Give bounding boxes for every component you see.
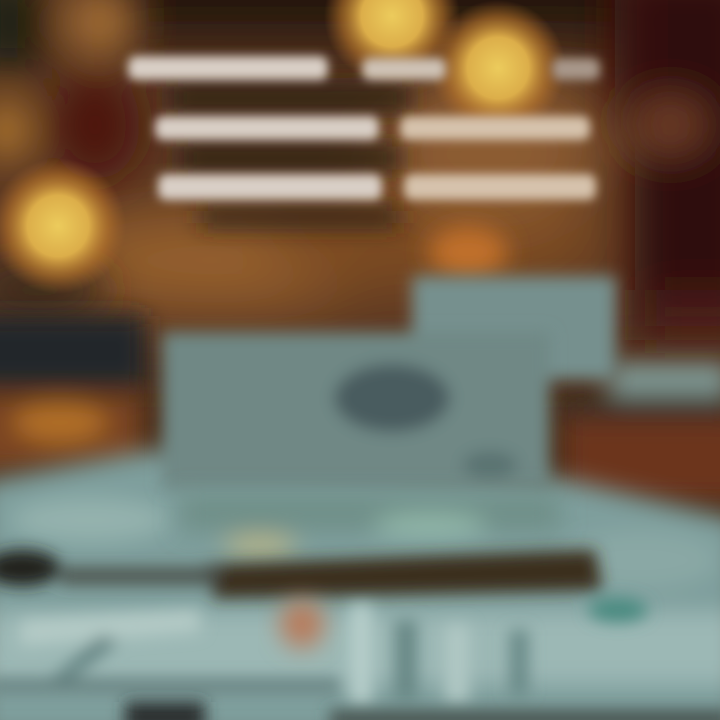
lower edge of stack with highlights [180,495,560,558]
rear banknote [412,276,616,380]
headline line 1 [128,56,600,80]
background: warm upper wall [0,0,720,360]
banknote portrait dark centre [334,364,450,432]
table: reddish brown right [560,362,720,500]
blurred headline lines [128,56,600,200]
headline line 2 [155,116,590,140]
central banknote card [162,332,550,490]
table: dark navy and orange left [0,316,145,468]
background: dark red and green upper left [0,0,140,314]
dark strap across the pile [0,550,648,622]
orange accent below strap [280,600,324,648]
note folds at the bottom [0,605,528,705]
dark bands behind headline [170,86,410,226]
headline line 3 [158,174,596,200]
bottom banknote pile [0,450,720,720]
background: dark red curtain right [615,0,720,340]
dark bottom edge [125,702,720,720]
bokeh lights [0,0,566,294]
